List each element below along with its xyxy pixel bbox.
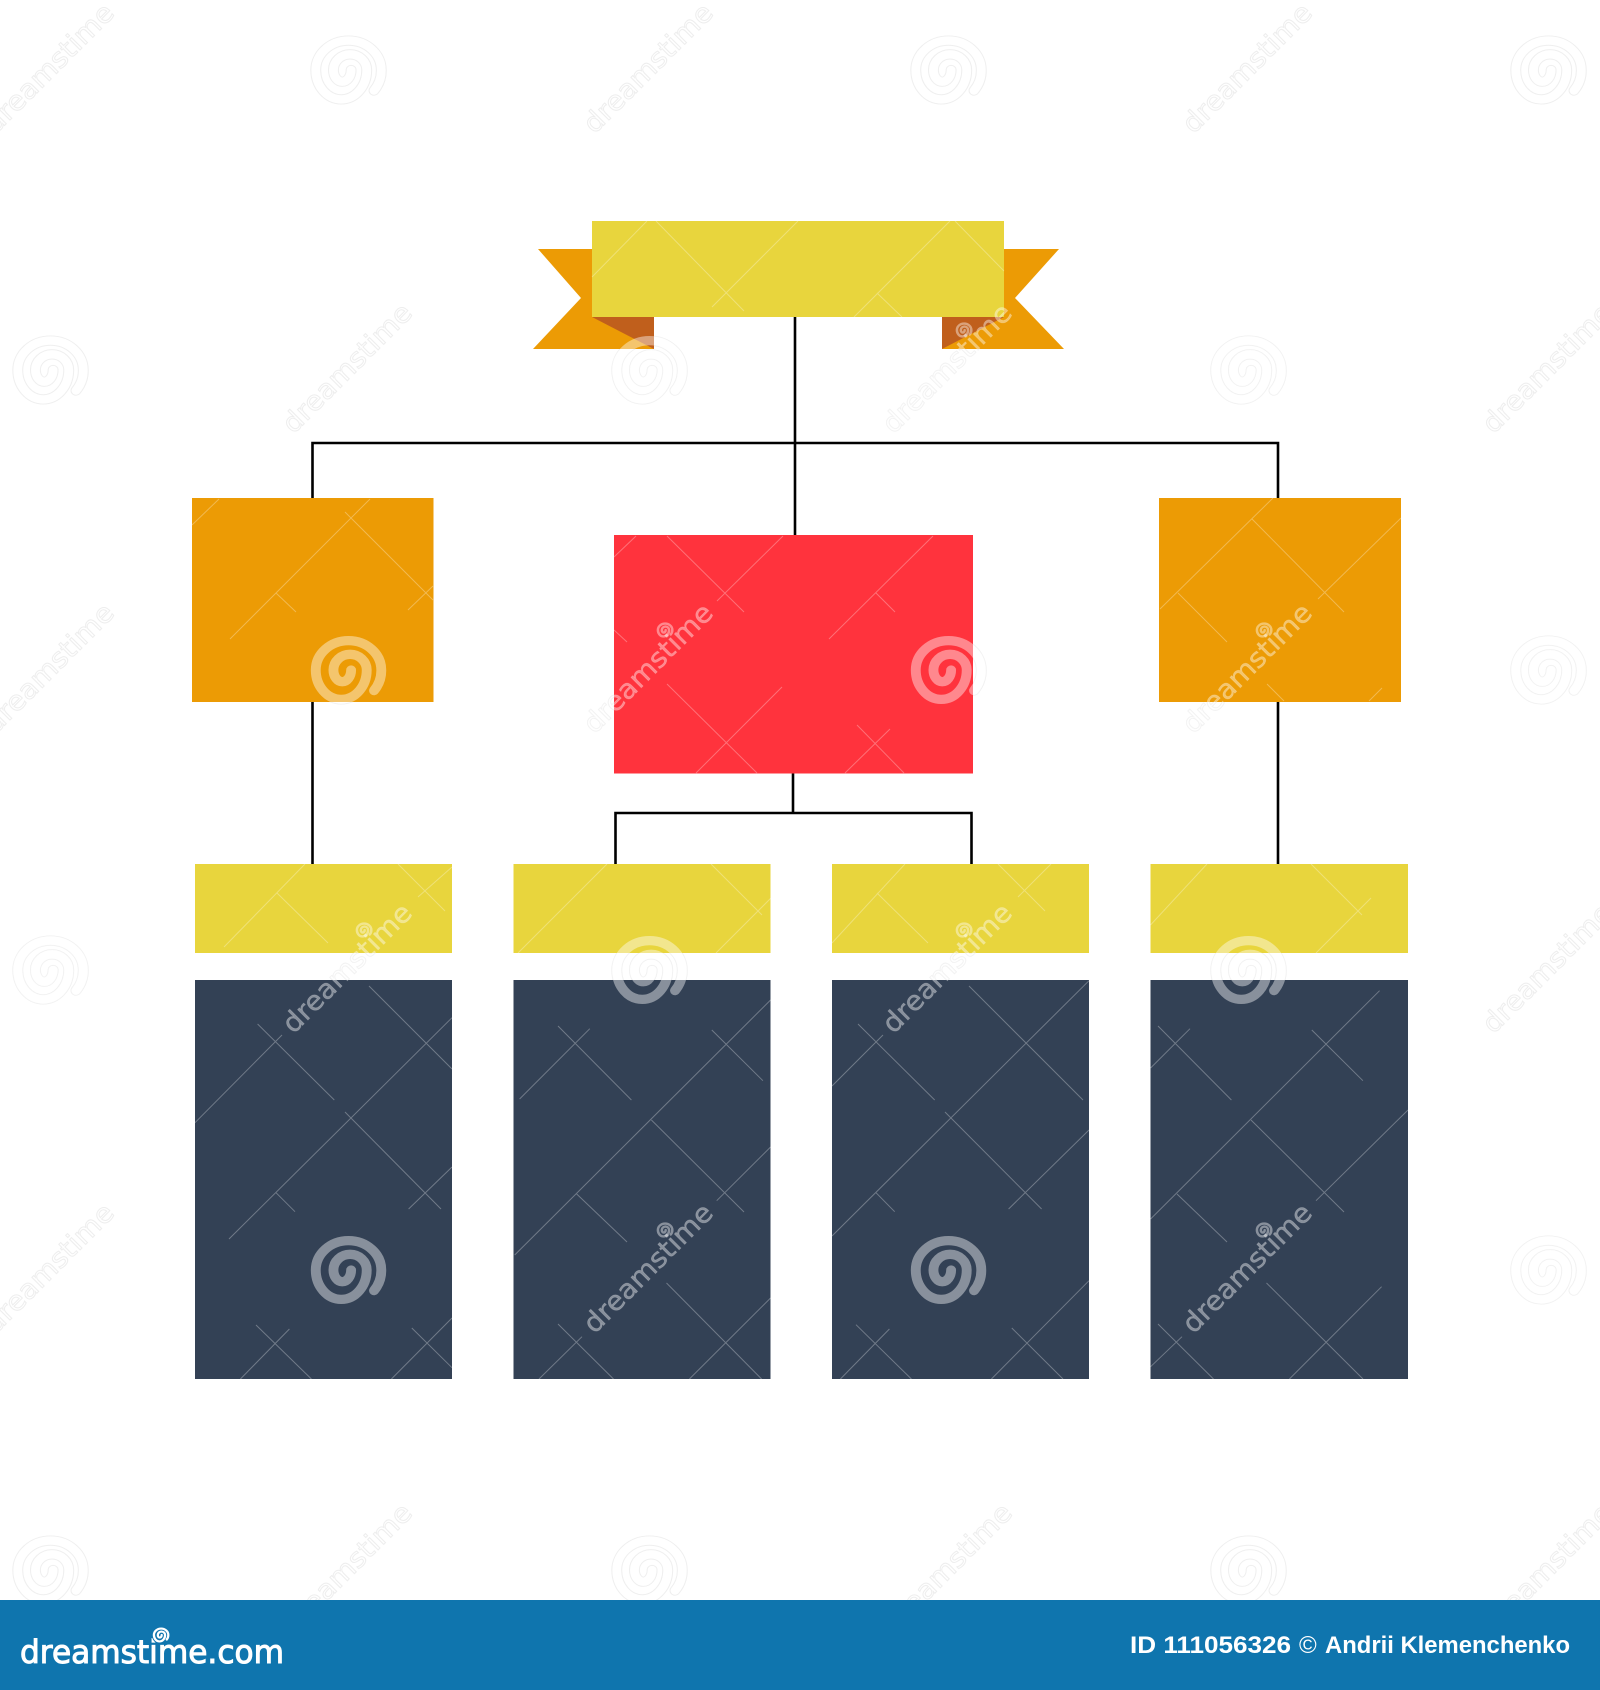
footer band: [0, 1600, 1600, 1690]
ribbon right tail: [942, 249, 1064, 349]
panel: column 1: [195, 864, 452, 1379]
ribbon main band: [592, 221, 1004, 317]
column 3 header: [832, 864, 1089, 953]
faint watermark text on white: dreamstime: [1176, 1197, 1319, 1340]
faint watermark text on white: dreamstime: [1176, 597, 1319, 740]
panel: centre red box: [614, 535, 973, 774]
footer credit name: Andrii Klemenchenko: [1325, 1632, 1570, 1659]
faint watermark text on white: dreamstime: [276, 897, 419, 1040]
watermark line pattern over panels: [192, 221, 1408, 1379]
watermark spirals over panels: [18, 341, 1581, 1299]
column 4 body: [1150, 980, 1408, 1379]
ribbon left tail: [533, 249, 654, 349]
faint watermark text on white: dreamstime: [577, 597, 720, 740]
faint watermark text on white: dreamstime: [577, 1197, 720, 1340]
faint watermark text on white: dreamstime: [577, 0, 720, 140]
connector lines: [312, 317, 1278, 864]
watermark text over panels: dreamstime: [577, 597, 720, 740]
footer logo spiral: [152, 1626, 170, 1644]
watermark text over panels: dreamstime: [276, 897, 419, 1040]
column 1 header: [195, 864, 452, 953]
panel: left orange box: [192, 498, 434, 702]
faint watermark text on white: dreamstime: [876, 297, 1019, 440]
watermark small spirals above text: [357, 324, 1271, 1236]
footer image id: ID 111056326: [1130, 1632, 1291, 1659]
column 4 header: [1150, 864, 1408, 953]
watermark text over panels: dreamstime: [876, 297, 1019, 440]
watermark text over panels: dreamstime: [876, 897, 1019, 1040]
top ribbon banner: [533, 221, 1064, 349]
panel: column 2: [514, 864, 770, 1379]
faint watermark text on white: dreamstime: [876, 897, 1019, 1040]
faint watermark text on white: dreamstime: [1176, 0, 1319, 140]
panel: column 3: [832, 864, 1089, 1379]
faint watermark text on white: dreamstime: [276, 297, 419, 440]
footer background: [0, 1600, 1600, 1690]
watermark text over panels: dreamstime: [1176, 1197, 1319, 1340]
panel: right orange box: [1159, 498, 1401, 702]
faint watermark text on white: dreamstime: [876, 1497, 1019, 1640]
footer logo text: dreamstime.com: [20, 1633, 284, 1671]
watermark text over panels: [276, 297, 1319, 1340]
watermark text over panels: dreamstime: [577, 1197, 720, 1340]
ribbon right fold: [942, 317, 1004, 349]
panel: column 4: [1150, 864, 1408, 1379]
watermark text over panels: dreamstime: [1176, 597, 1319, 740]
ribbon left fold: [592, 317, 654, 349]
column 2 body: [514, 980, 770, 1379]
footer copyright sign: ©: [1299, 1632, 1317, 1659]
column 1 body: [195, 980, 452, 1379]
faint watermark text on white: dreamstime: [276, 1497, 419, 1640]
column 3 body: [832, 980, 1089, 1379]
column 2 header: [514, 864, 770, 953]
